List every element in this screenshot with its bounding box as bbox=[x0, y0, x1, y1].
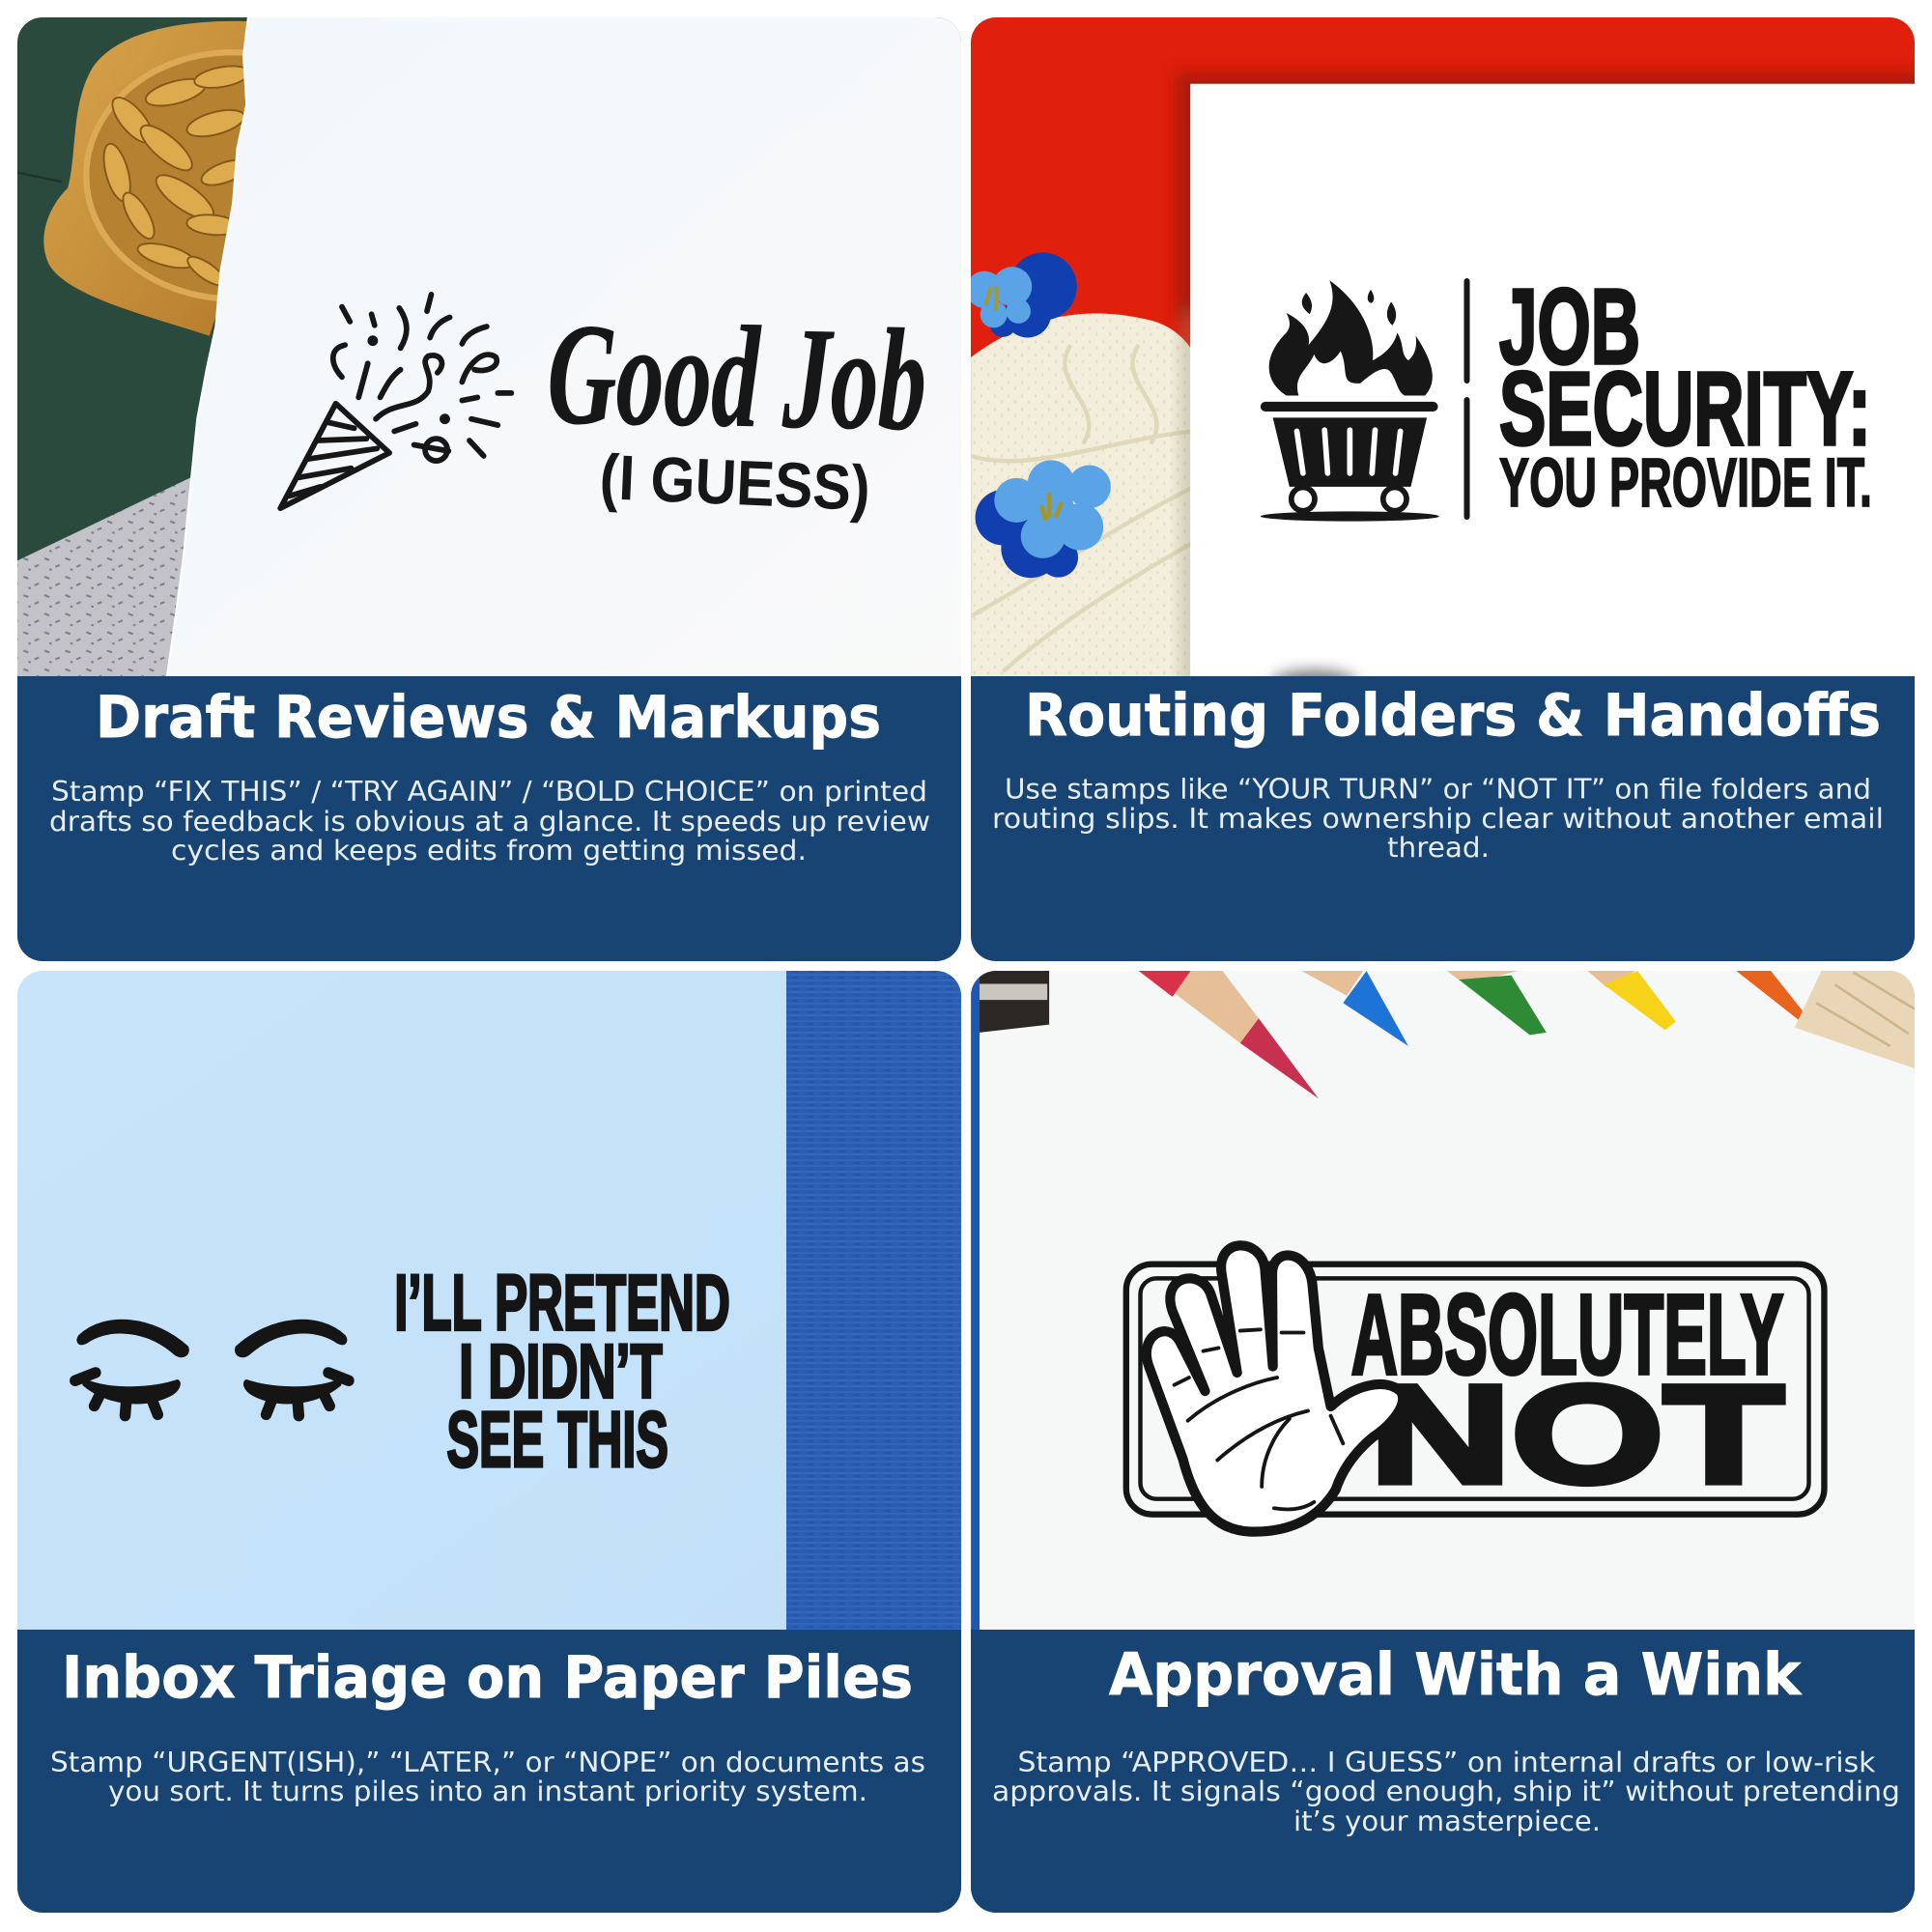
body text bbox=[992, 773, 1884, 864]
stamp text: Good Job (I Guess): (I GUESS) bbox=[598, 440, 871, 524]
stamp text: Job Security: JOB bbox=[1499, 268, 1640, 386]
body text: Stamp “FIX THIS” / “TRY AGAIN” / “BOLD CHOICE” on printed bbox=[51, 776, 927, 808]
icon: raised hand bbox=[1147, 1245, 1403, 1532]
stamp text: I'll pretend: I DIDN’T bbox=[459, 1327, 663, 1413]
stamp: absolutely not sign: NOT bbox=[1370, 1356, 1783, 1512]
photo: torn paper and wax seal bbox=[13, 13, 974, 684]
body text: drafts so feedback is obvious at a glance. It speeds up review bbox=[49, 806, 930, 838]
caption panel bbox=[971, 1630, 1915, 1915]
stamp text: I'll pretend: I’LL PRETEND bbox=[394, 1259, 730, 1347]
stamp: absolutely not sign bbox=[1126, 1245, 1824, 1532]
stamp text: Good Job (I Guess) bbox=[546, 294, 927, 524]
stamp text: I'll pretend: SEE THIS bbox=[446, 1396, 668, 1484]
heading: Draft Reviews & Markups bbox=[96, 684, 881, 752]
caption panel bbox=[17, 676, 961, 961]
stamp: party popper bbox=[280, 295, 511, 508]
body text bbox=[49, 776, 930, 867]
panel: inbox triage bbox=[17, 971, 965, 1915]
caption panel bbox=[17, 1630, 961, 1915]
stamp text: Good Job (I Guess): Good Job bbox=[546, 294, 927, 461]
stamp icon: closed eyes bbox=[75, 1320, 349, 1416]
heading: Inbox Triage on Paper Piles bbox=[62, 1644, 913, 1712]
stamp icon: burning dumpster bbox=[1261, 280, 1439, 522]
heading: Routing Folders & Handoffs bbox=[1025, 682, 1881, 750]
divider bar bbox=[1464, 278, 1470, 520]
body text: Stamp “URGENT(ISH),” “LATER,” or “NOPE” on documents as bbox=[50, 1747, 925, 1778]
panel: approval with a wink bbox=[966, 966, 1927, 1915]
photo: white paper and coloured pencils bbox=[966, 966, 1927, 1644]
body text: you sort. It turns piles into an instant priority system. bbox=[108, 1776, 867, 1807]
caption panel bbox=[971, 676, 1915, 961]
body text bbox=[992, 1747, 1900, 1837]
body text: Stamp “APPROVED… I GUESS” on internal drafts or low-risk bbox=[1018, 1747, 1876, 1778]
stamp text: I'll pretend bbox=[394, 1259, 730, 1484]
heading: Approval With a Wink bbox=[1109, 1641, 1803, 1709]
panel: routing folders bbox=[966, 13, 1932, 961]
body text: it’s your masterpiece. bbox=[1293, 1805, 1601, 1837]
photo: blue paper and fabric bbox=[17, 971, 965, 1637]
body text: routing slips. It makes ownership clear without another email bbox=[992, 803, 1884, 835]
photo: red paper, knit and flowers bbox=[966, 13, 1932, 697]
body text: approvals. It signals “good enough, ship it” without pretending bbox=[992, 1776, 1900, 1807]
panel: draft reviews bbox=[13, 13, 974, 961]
body text: thread. bbox=[1387, 832, 1490, 864]
body text bbox=[50, 1747, 925, 1807]
stamp text: Job Security bbox=[1499, 268, 1872, 522]
body text: cycles and keeps edits from getting missed. bbox=[171, 835, 807, 867]
body text: Use stamps like “YOUR TURN” or “NOT IT” on file folders and bbox=[1005, 773, 1871, 806]
